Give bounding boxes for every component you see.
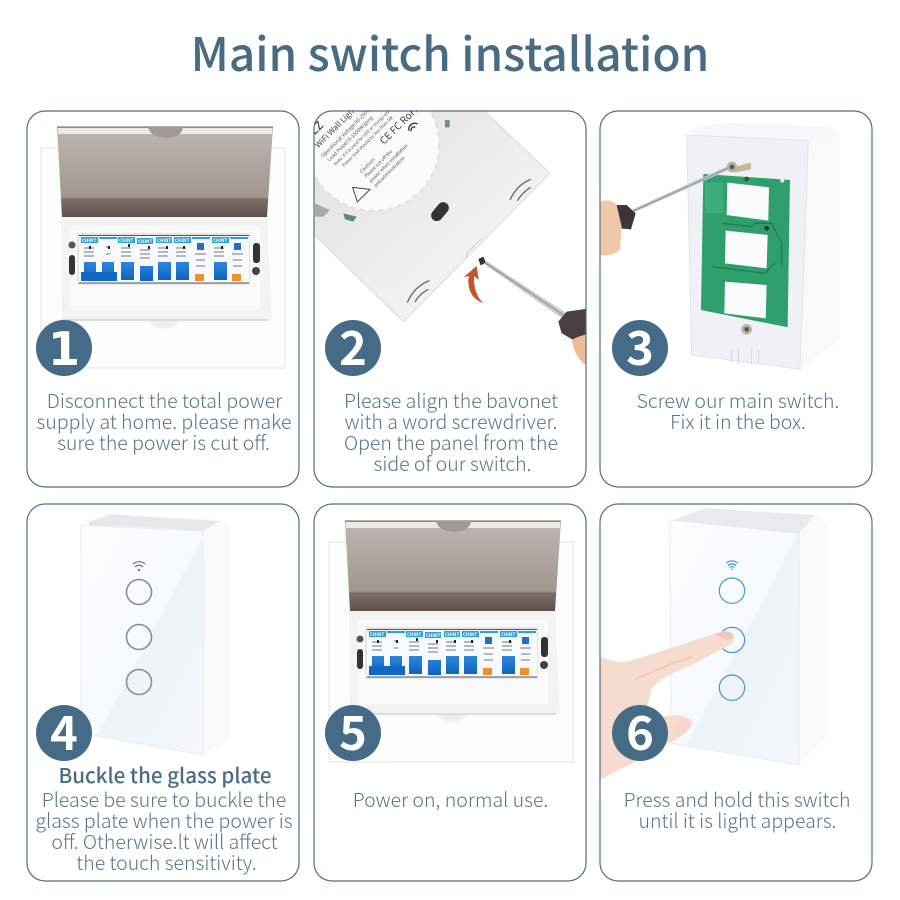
text: step 2 instructions	[344, 385, 558, 477]
illustration: switch back plate and screwdriver: Operational Voltage:90-250V	[320, 108, 371, 159]
badge: number 3: 3	[626, 310, 654, 379]
text: step 1 instructions: supply at home. please make	[37, 406, 291, 435]
heading: buckle the glass plate: Buckle the glass plate	[58, 759, 272, 789]
panel: step 6 press and hold	[600, 504, 872, 881]
text: step 5 instructions: Power on, normal use.	[353, 784, 548, 813]
text: step 2 instructions: side of our switch.	[374, 448, 531, 477]
text: step 4 instructions: the touch sensitivity.	[76, 847, 257, 876]
badge: number 1	[36, 320, 92, 376]
illustration: switch back plate and screwdriver: and administration	[372, 155, 407, 189]
illustration: switch back plate and screwdriver: Note: if it is used for LED or energy saving	[332, 103, 396, 167]
text: step 6 instructions	[624, 784, 850, 834]
panel: step 4 buckle the glass plate	[27, 504, 299, 881]
badge: number 3	[612, 310, 668, 379]
illustration: switch back plate and screwdriver: Please cut off the	[363, 148, 394, 179]
title: Main switch installation	[191, 19, 709, 85]
text: step 1 instructions: sure the power is cut off.	[57, 427, 270, 456]
illustration: switch back plate and screwdriver: Load Power:5-1500W/gang	[326, 114, 375, 163]
badge: number 5: 5	[339, 695, 367, 764]
text: step 4 instructions: Please be sure to buckle the	[42, 784, 286, 813]
text: step 3 instructions	[637, 385, 839, 435]
text: step 4 instructions: glass plate when the power is	[35, 805, 293, 834]
text: step 6 instructions: until it is light appears.	[639, 805, 836, 834]
text: step 3 instructions: Screw our main switch.	[637, 385, 839, 414]
text: step 6 instructions: Press and hold this switch	[624, 784, 850, 813]
badge: number 5	[325, 695, 381, 764]
text: step 1 instructions: Disconnect the total power	[47, 385, 283, 414]
badge: number 4: 4	[50, 695, 78, 764]
badge: number 2	[325, 310, 381, 379]
badge: number 6	[612, 695, 668, 764]
text: step 3 instructions: Fix it in the box.	[670, 406, 806, 435]
illustration: switch back plate and screwdriver: WiFi Wall Light	[313, 104, 359, 150]
text: step 2 instructions: Please align the bavonet	[344, 385, 558, 414]
badge: number 2: 2	[339, 310, 367, 379]
illustration: switch back plate and screwdriver: Caution:	[358, 155, 377, 175]
panel: step 1 disconnect power	[27, 111, 299, 487]
illustration: switch back plate and screwdriver: Power load should be less than 5W	[340, 114, 395, 168]
text: step 1 instructions	[37, 385, 291, 456]
badge: number 4	[36, 695, 92, 764]
illustration: breaker box powered on	[329, 521, 573, 762]
text: step 4 instructions	[35, 784, 293, 876]
illustration: switch back plate and screwdriver: power when installation	[368, 142, 410, 184]
illustration: switch back plate and screwdriver: CE FC RoHS	[376, 98, 424, 147]
badge: number 6: 6	[626, 695, 654, 764]
panel: step 5 power on	[314, 504, 586, 881]
text: step 4 instructions: off. Otherwise.lt will affect	[51, 826, 278, 855]
panel: step 3 screw the switch	[600, 111, 872, 487]
panel: step 2 open the panel	[313, 110, 587, 488]
illustration: breaker box with open lid	[41, 127, 285, 368]
illustration: open switch box with green circuit board	[600, 123, 840, 369]
illustration: finger pressing lit switch	[600, 508, 830, 780]
illustration: switch back plate and screwdriver	[314, 112, 586, 365]
illustration: switch back plate and screwdriver: LZ	[306, 117, 327, 138]
text: step 2 instructions: Open the panel from the	[344, 427, 558, 456]
text: step 2 instructions: with a word screwdriver.	[345, 406, 557, 435]
badge: number 1: 1	[48, 322, 80, 376]
illustration: glass switch with grey rings	[81, 514, 231, 755]
